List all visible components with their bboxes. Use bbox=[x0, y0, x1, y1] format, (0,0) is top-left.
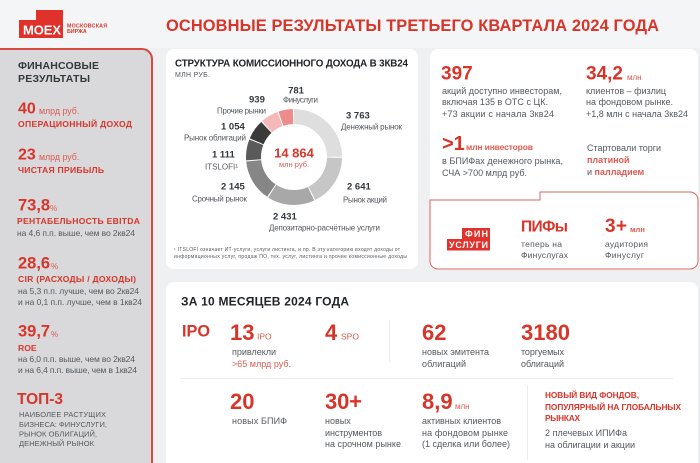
donut labels: 3 763 bbox=[346, 110, 370, 122]
stat: ROE: ROE bbox=[18, 343, 37, 353]
stat: EBITDA margin bbox=[17, 196, 140, 238]
stat: mutual funds: Финуслугах bbox=[521, 250, 569, 260]
heading: financial results bbox=[18, 60, 99, 85]
stat: 3+ million audience bbox=[605, 216, 648, 260]
stat: net profit: ЧИСТАЯ ПРИБЫЛЬ bbox=[18, 165, 104, 175]
stat: 3180 traded bonds bbox=[521, 320, 570, 369]
stat: CIR: CIR (РАСХОДЫ / ДОХОДЫ) bbox=[18, 274, 136, 284]
stat: 3+ million audience: 3+ bbox=[605, 216, 627, 237]
panel: commission income structure bbox=[166, 49, 418, 269]
icon: Finuslugi logo: ФИН bbox=[465, 229, 488, 239]
stat: operating income: ОПЕРАЦИОННЫЙ ДОХОД bbox=[18, 118, 132, 129]
donut centre total bbox=[274, 146, 315, 169]
stat: mutual funds: теперь на bbox=[521, 239, 562, 249]
stat: 30+ new instruments bbox=[325, 389, 401, 449]
text: platinum and palladium trading: и палладием bbox=[587, 167, 645, 177]
donut labels: Срочный рынок bbox=[192, 194, 248, 204]
stat: 8,9 million active clients: млн bbox=[455, 402, 470, 411]
stat: EBITDA margin: на 4,6 п.п. выше, чем во 2кв24 bbox=[17, 228, 135, 238]
callout: new fund type bbox=[545, 389, 681, 450]
donut labels: 2 145 bbox=[221, 182, 245, 192]
icon: Finuslugi logo: УСЛУГИ bbox=[449, 240, 488, 250]
donut chart bbox=[254, 116, 334, 198]
stat: over 1 million investors: млн инвесторов bbox=[466, 142, 533, 152]
stat: 30+ new instruments: на срочном рынке bbox=[325, 439, 401, 449]
stat: 3180 traded bonds: облигаций bbox=[521, 359, 564, 369]
footnote: информационных услуг, продаж ПО, тех. услуг, листинга и прочие комиссионные доходы bbox=[174, 254, 407, 260]
stat: ROE: на 6,0 п.п. выше, чем во 2кв24 bbox=[18, 354, 135, 364]
stat: top-3: ТОП-3 bbox=[17, 391, 63, 408]
stat: 8,9 million active clients: (1 сделка или более) bbox=[422, 439, 510, 449]
donut centre total: млн руб. bbox=[279, 160, 309, 169]
heading: financial results: РЕЗУЛЬТАТЫ bbox=[18, 73, 90, 85]
stat: 4 SPO: SPO bbox=[341, 332, 359, 342]
stat: operating income: 40 bbox=[18, 100, 36, 118]
stat: 20 new exchange funds: 20 bbox=[230, 389, 254, 414]
stat: 34,2 million clients: на фондовом рынке. bbox=[586, 97, 673, 107]
stat: EBITDA margin: % bbox=[50, 204, 57, 213]
text: platinum and palladium trading: платиной bbox=[587, 155, 630, 165]
icon: Finuslugi logo bbox=[447, 228, 490, 250]
stat: 20 new exchange funds bbox=[230, 389, 287, 426]
stat: top-3: РЫНОК ОБЛИГАЦИЙ, bbox=[19, 430, 97, 438]
panel: 10 months of 2024 bbox=[166, 282, 698, 463]
donut labels: Депозитарно-расчётные услуги bbox=[269, 224, 380, 232]
stat: ROE: 39,7 bbox=[18, 322, 50, 340]
logo: MOEX: БИРЖА bbox=[67, 29, 87, 35]
stat: top-3: БИЗНЕСА: ФИНУСЛУГИ, bbox=[19, 420, 107, 429]
donut labels: ITSLOFI¹ bbox=[205, 162, 238, 172]
donut labels: 781 bbox=[288, 86, 305, 96]
donut labels: 2 641 bbox=[347, 182, 371, 192]
stat: 62 new issuers: 62 bbox=[422, 320, 446, 345]
stat: top-3 bbox=[17, 391, 107, 448]
heading: chart title bbox=[175, 58, 409, 79]
stat: over 1 million investors: >1 bbox=[442, 133, 465, 155]
stat: 62 new issuers: новых эмитента bbox=[422, 347, 489, 357]
stat: over 1 million investors bbox=[442, 133, 563, 178]
stat: 34,2 million clients: млн bbox=[627, 73, 642, 82]
donut labels: Денежный рынок bbox=[341, 122, 402, 132]
stat: 397 shares bbox=[441, 64, 562, 119]
stat: 3180 traded bonds: торгуемых bbox=[521, 347, 564, 357]
stat: 13 IPO: >65 млрд руб. bbox=[232, 359, 291, 369]
stat: 62 new issuers: облигаций bbox=[422, 359, 466, 369]
stat: 4 SPO bbox=[325, 320, 359, 345]
donut labels: Рынок облигаций bbox=[184, 134, 246, 142]
logo: MOEX: МОСКОВСКАЯ bbox=[67, 24, 107, 30]
donut labels bbox=[184, 86, 402, 232]
stat: 3+ million audience: млн bbox=[630, 225, 645, 234]
heading: financial results: ФИНАНСОВЫЕ bbox=[18, 60, 99, 72]
stat: 30+ new instruments: 30+ bbox=[325, 389, 362, 414]
text: platinum and palladium trading: Стартовали торги bbox=[587, 143, 661, 153]
heading: chart title: МЛН РУБ. bbox=[175, 72, 210, 79]
stat: over 1 million investors: СЧА >700 млрд руб. bbox=[442, 168, 527, 178]
stat: 13 IPO: IPO bbox=[257, 332, 272, 342]
stat: 8,9 million active clients bbox=[422, 389, 510, 449]
stat: 397 shares: акций доступно инвесторам, bbox=[442, 86, 562, 96]
stat: net profit: млрд руб. bbox=[39, 152, 79, 162]
donut labels: 2 431 bbox=[273, 212, 297, 222]
panel: financial results bbox=[0, 49, 152, 463]
stat: 13 IPO: 13 bbox=[230, 320, 254, 345]
stat: 30+ new instruments: новых bbox=[325, 416, 351, 426]
stat: over 1 million investors: в БПИФах денежного рынка, bbox=[442, 156, 563, 166]
stat: 8,9 million active clients: на фондовом рынке bbox=[422, 428, 508, 438]
donut labels: Финуслуги bbox=[283, 96, 318, 104]
callout: new fund type: РЫНКАХ bbox=[545, 413, 580, 423]
stat: operating income bbox=[18, 100, 132, 129]
stat: mutual funds: ПИФы bbox=[521, 218, 568, 236]
logo: MOEX: MOEX bbox=[23, 22, 61, 38]
callout: new fund type: НОВЫЙ ВИД ФОНДОВ, bbox=[545, 389, 639, 400]
stat: 30+ new instruments: инструментов bbox=[325, 428, 382, 438]
stat: 13 IPO: привлекли bbox=[232, 347, 276, 357]
panel: Finuslugi tab bbox=[430, 192, 698, 269]
stat: ROE bbox=[18, 322, 137, 375]
donut labels: Рынок акций bbox=[343, 196, 387, 204]
stat: 13 IPO bbox=[230, 320, 291, 369]
stat: net profit: 23 bbox=[18, 146, 36, 164]
stat: EBITDA margin: 73,8 bbox=[18, 196, 50, 214]
stat: 397 shares: 397 bbox=[441, 64, 473, 84]
stat: EBITDA margin: РЕНТАБЕЛЬНОСТЬ EBITDA bbox=[17, 216, 140, 226]
stat: 34,2 million clients: 34,2 bbox=[586, 64, 623, 84]
stat: CIR: % bbox=[51, 262, 58, 271]
footnote bbox=[174, 247, 407, 260]
stat: 34,2 million clients bbox=[586, 64, 688, 119]
stat: 62 new issuers bbox=[422, 320, 489, 369]
stat: operating income: млрд руб. bbox=[39, 106, 79, 116]
stat: 34,2 million clients: +1,8 млн с начала 3кв24 bbox=[586, 109, 688, 119]
title: ОСНОВНЫЕ РЕЗУЛЬТАТЫ ТРЕТЬЕГО КВАРТАЛА 2024 ГОДА bbox=[166, 17, 659, 35]
panel: investors and clients bbox=[430, 49, 698, 270]
label: IPO: IPO bbox=[182, 322, 210, 340]
stat: mutual funds bbox=[521, 218, 569, 260]
stat: 4 SPO: 4 bbox=[325, 320, 338, 345]
stat: net profit bbox=[18, 146, 104, 175]
footnote: ¹ ITSLOFI означает ИТ-услуги, услуги листинга, и пр. В эту категорию входят доходы от bbox=[174, 247, 401, 253]
stat: 34,2 million clients: клиентов – физлиц bbox=[586, 86, 666, 96]
stat: 3+ million audience: Финуслуг bbox=[605, 250, 644, 260]
stat: 397 shares: +73 акции с начала 3кв24 bbox=[442, 109, 554, 119]
stat: 397 shares: включая 135 в ОТС с ЦК. bbox=[442, 97, 548, 107]
heading: 10 months: ЗА 10 МЕСЯЦЕВ 2024 ГОДА bbox=[181, 294, 349, 308]
stat: 8,9 million active clients: 8,9 bbox=[422, 389, 453, 414]
stat: ROE: и на 6,4 п.п. выше, чем в 1кв24 bbox=[18, 365, 137, 375]
stat: CIR bbox=[18, 254, 142, 307]
stat: CIR: на 5,3 п.п. лучше, чем во 2кв24 bbox=[18, 286, 139, 296]
stat: top-3: НАИБОЛЕЕ РАСТУЩИХ bbox=[19, 410, 106, 419]
logo: MOEX bbox=[19, 10, 107, 38]
stat: 20 new exchange funds: новых БПИФ bbox=[232, 416, 287, 426]
stat: 8,9 million active clients: активных клиентов bbox=[422, 416, 501, 426]
donut centre total: 14 864 bbox=[274, 146, 315, 160]
donut labels: 1 111 bbox=[212, 150, 235, 160]
callout: new fund type: на облигации и акции bbox=[545, 440, 635, 450]
donut labels: 1 054 bbox=[221, 122, 245, 132]
donut labels: Прочие рынки bbox=[217, 106, 266, 116]
stat: CIR: и на 0,1 п.п. лучше, чем в 1кв24 bbox=[18, 297, 142, 307]
callout: new fund type: ПОПУЛЯРНЫЙ НА ГЛОБАЛЬНЫХ bbox=[545, 401, 681, 412]
stat: 3+ million audience: аудитория bbox=[605, 239, 648, 249]
text: platinum and palladium trading bbox=[587, 143, 661, 177]
heading: chart title: СТРУКТУРА КОМИССИОННОГО ДОХОДА В 3КВ24 bbox=[175, 58, 409, 70]
stat: CIR: 28,6 bbox=[18, 254, 50, 272]
stat: ROE: % bbox=[51, 330, 58, 339]
donut labels: 939 bbox=[249, 94, 265, 106]
callout: new fund type: 2 плечевых ИПИФа bbox=[545, 428, 627, 438]
stat: 3180 traded bonds: 3180 bbox=[521, 320, 570, 345]
stat: top-3: ДЕНЕЖНЫЙ РЫНОК bbox=[19, 439, 95, 448]
